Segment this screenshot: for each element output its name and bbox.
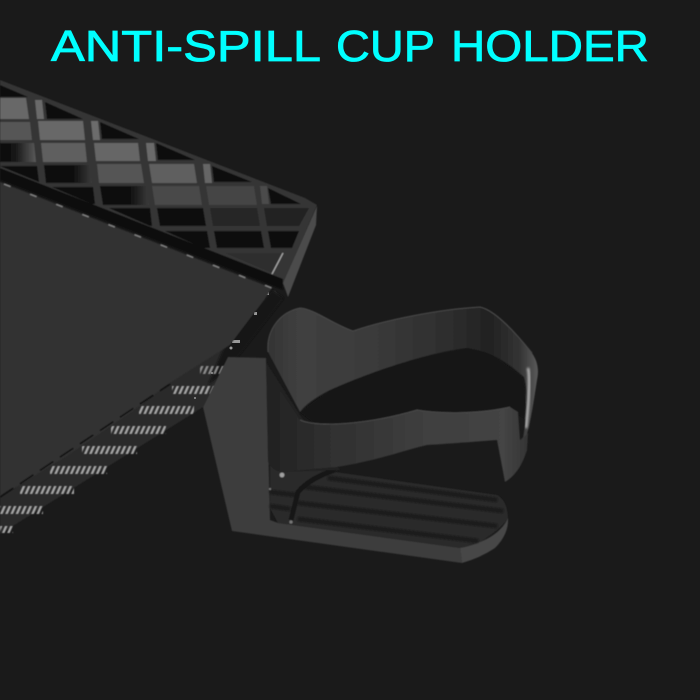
holder body shadow — [266, 362, 340, 472]
upper ring band — [268, 307, 538, 438]
base plate rim — [460, 518, 508, 563]
corner speckles — [194, 292, 269, 399]
carbon weave stripes — [0, 366, 228, 533]
lower band rim highlight — [300, 407, 510, 424]
stitched edge — [4, 184, 272, 288]
desk top surface — [0, 182, 272, 497]
title — [51, 22, 649, 71]
underside shadow line — [0, 384, 170, 497]
panel frame — [0, 80, 317, 283]
black trim strip — [0, 168, 283, 290]
L-shaped bracket and base plate — [203, 357, 462, 563]
mesh cells — [0, 85, 309, 273]
title: ANTI-SPILL — [51, 22, 321, 71]
cup holder — [203, 307, 538, 563]
desk corner: mesh storage panel — [0, 80, 317, 297]
band edge highlight — [268, 307, 532, 353]
white accent line — [272, 253, 283, 274]
inner hole of holder — [300, 348, 528, 430]
panel side face — [283, 206, 317, 297]
lower ring band — [268, 372, 528, 482]
carbon fibre edge band — [0, 290, 284, 534]
title: HOLDER — [451, 22, 649, 71]
title: CUP — [336, 22, 435, 71]
specular highlight — [526, 368, 529, 428]
base plate top surface — [270, 462, 508, 548]
plate ribs — [270, 478, 503, 541]
dark band near the corner — [208, 290, 284, 385]
hinge clip — [269, 470, 335, 524]
